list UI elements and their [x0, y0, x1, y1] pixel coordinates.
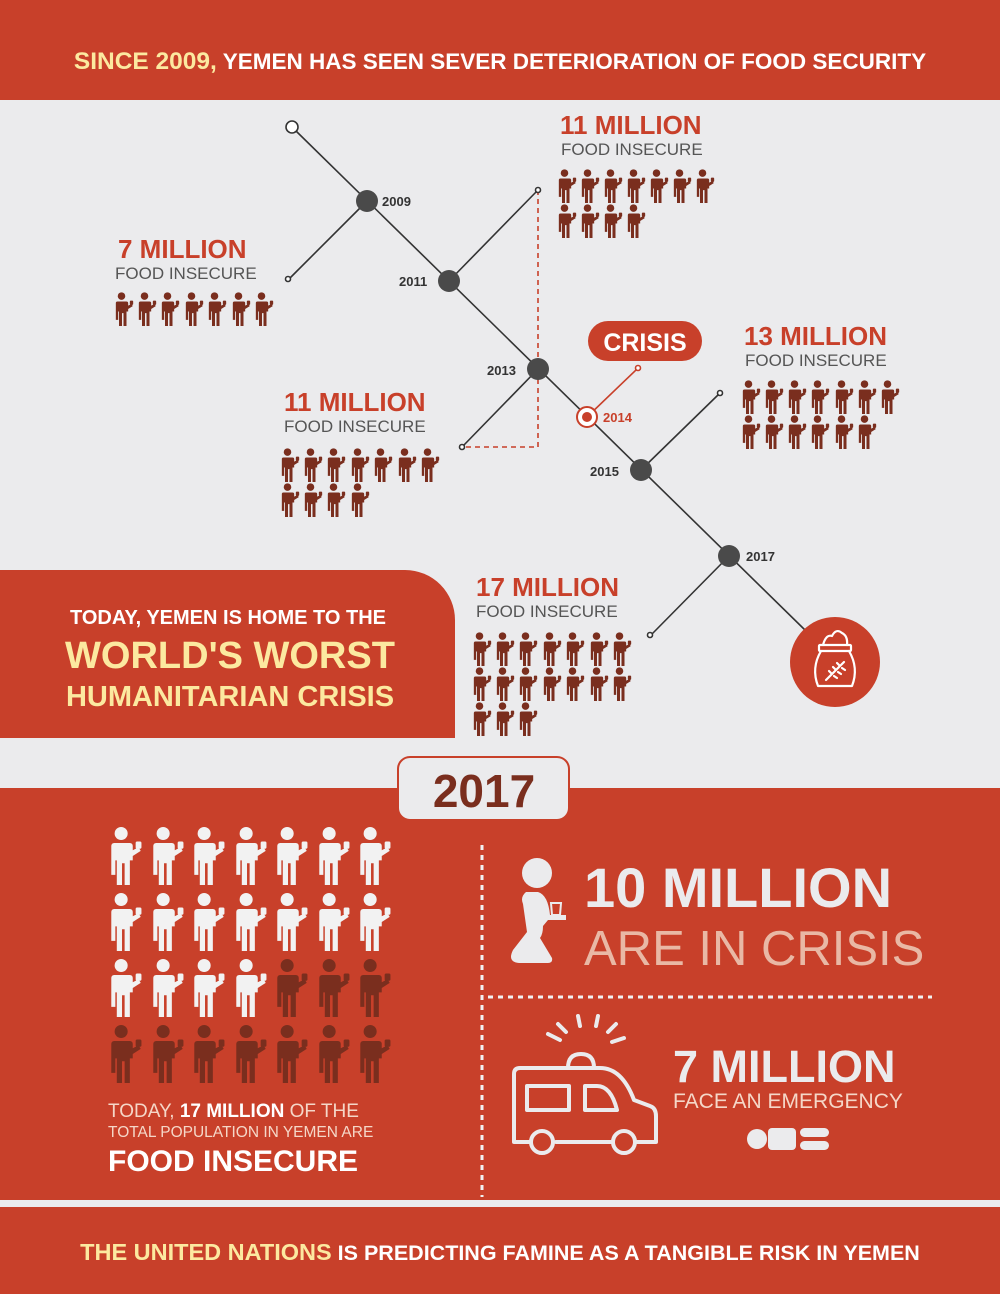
- stat: 17 million 2017: [474, 572, 631, 736]
- 2017 tab: 2017: [433, 765, 535, 817]
- stat: 7 million 2009: FOOD INSECURE: [115, 264, 257, 283]
- crisis label: [588, 321, 702, 361]
- stat: 7 million 2009: [115, 234, 273, 326]
- stat: 11 million 2013: FOOD INSECURE: [284, 417, 426, 436]
- icon: lying person: [747, 1128, 829, 1150]
- stat: 7 million emergency: FACE AN EMERGENCY: [673, 1090, 903, 1113]
- stat: 10 million in crisis: ARE IN CRISIS: [584, 922, 924, 976]
- crisis label: CRISIS: [603, 329, 687, 357]
- footer banner: THE UNITED NATIONS IS PREDICTING FAMINE AS A TANGIBLE RISK IN YEMEN: [80, 1239, 920, 1265]
- timeline nodes: 2011: [399, 274, 427, 289]
- icon: kneeling person: [511, 858, 566, 963]
- stat: 11 million 2011: 11 MILLION: [560, 110, 702, 140]
- stat: 7 million emergency: 7 MILLION: [673, 1041, 896, 1092]
- header banner: [0, 0, 1000, 100]
- timeline nodes: 2017: [746, 549, 775, 564]
- timeline nodes: 2015: [590, 464, 619, 479]
- stat: 11 million 2011: [559, 110, 714, 238]
- timeline nodes: 2014: [603, 410, 633, 425]
- timeline nodes: 2009: [382, 194, 411, 209]
- stat: 10 million in crisis: 10 MILLION: [584, 856, 892, 919]
- stat: 17 million 2017: 17 MILLION: [476, 572, 619, 602]
- stat: 13 million 2015: FOOD INSECURE: [745, 351, 887, 370]
- panel: worst crisis: WORLD'S WORST: [65, 635, 395, 677]
- timeline nodes: [356, 190, 775, 567]
- icon: food bag: [790, 617, 880, 707]
- stat: 7 million emergency: [673, 1041, 903, 1150]
- panel: worst crisis: HUMANITARIAN CRISIS: [66, 681, 394, 713]
- stat: 13 million 2015: [743, 321, 899, 450]
- panel: worst crisis: TODAY, YEMEN IS HOME TO THE: [70, 607, 386, 629]
- food insecure caption: FOOD INSECURE: [108, 1145, 358, 1178]
- timeline: [286, 121, 805, 638]
- header title: SINCE 2009, YEMEN HAS SEEN SEVER DETERIORATION OF FOOD SECURITY: [74, 48, 926, 75]
- panel: worst crisis: [0, 570, 455, 738]
- stat: 11 million 2011: FOOD INSECURE: [561, 140, 703, 159]
- timeline nodes: 2013: [487, 363, 516, 378]
- food insecure caption: [108, 1101, 373, 1178]
- big people grid: [111, 827, 390, 1084]
- 2017 tab: [398, 757, 569, 820]
- stat: 11 million 2013: 11 MILLION: [284, 387, 426, 417]
- panel: 2017 bottom: [0, 757, 1000, 1200]
- stat: 11 million 2013: [282, 387, 439, 518]
- stat: 10 million in crisis: [584, 856, 924, 976]
- stat: 7 million 2009: 7 MILLION: [118, 234, 247, 264]
- stat: 13 million 2015: 13 MILLION: [744, 321, 887, 351]
- stat: 17 million 2017: FOOD INSECURE: [476, 602, 618, 621]
- icon: ambulance: [514, 1016, 656, 1153]
- footer banner: [0, 1207, 1000, 1294]
- food insecure caption: TODAY, 17 MILLION OF THE: [108, 1101, 359, 1122]
- food insecure caption: TOTAL POPULATION IN YEMEN ARE: [108, 1124, 373, 1141]
